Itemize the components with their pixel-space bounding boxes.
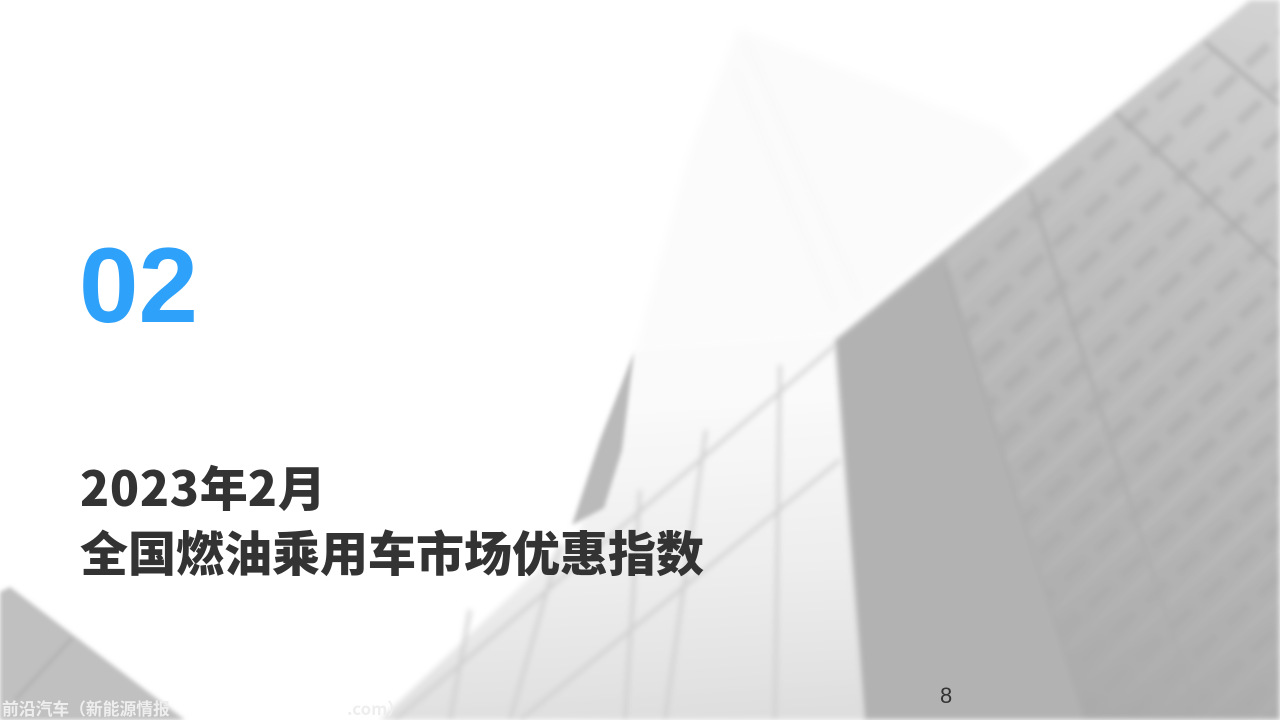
page number: 8 bbox=[940, 683, 952, 708]
watermark bbox=[2, 696, 404, 720]
watermark: 前沿汽车（新能源情报 bbox=[2, 696, 170, 720]
title: 2023年2月 bbox=[80, 450, 326, 520]
section number: 02 bbox=[79, 225, 198, 345]
title bbox=[80, 450, 704, 585]
bottom-left building bbox=[0, 587, 185, 720]
watermark: .com） bbox=[347, 696, 404, 720]
pale tower bbox=[635, 28, 1032, 352]
glass facade bbox=[380, 335, 864, 720]
title: 全国燃油乘用车市场优惠指数 bbox=[80, 515, 704, 585]
right building bbox=[835, 0, 1280, 720]
dark sliver bbox=[572, 352, 634, 525]
